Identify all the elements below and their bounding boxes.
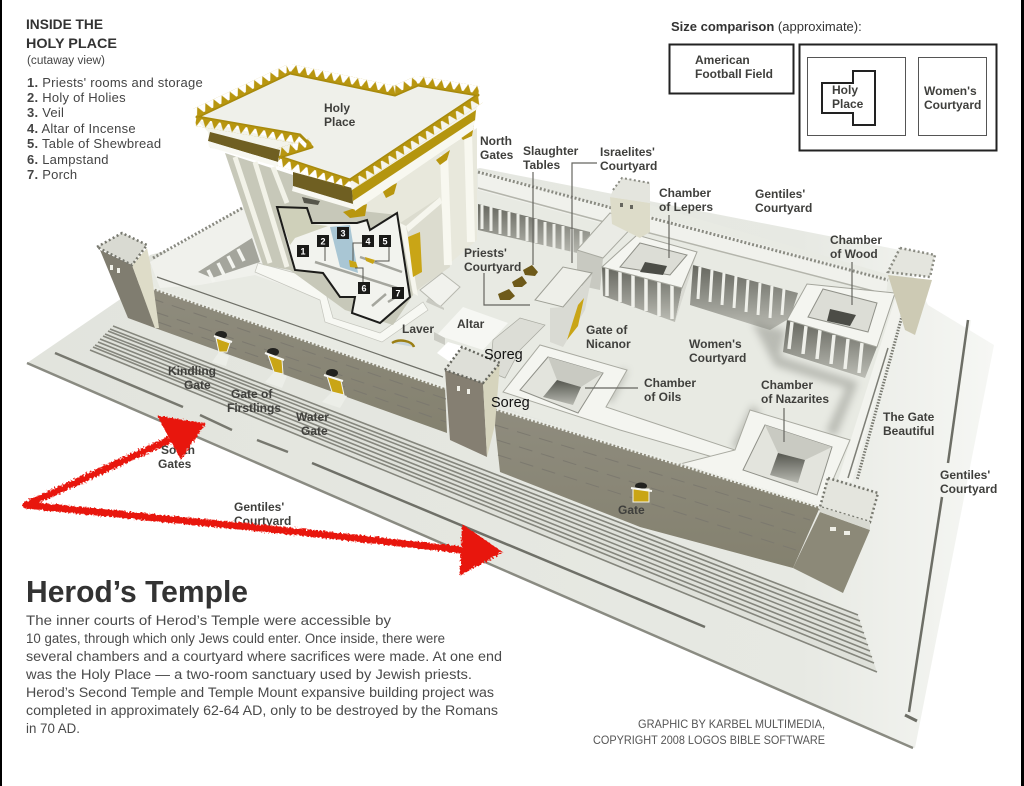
red hand-drawn arrow — [26, 417, 501, 574]
north wall — [478, 170, 888, 295]
chamber of lepers — [602, 235, 697, 288]
map labels: Holy — [324, 101, 350, 115]
map labels: Gate of — [231, 387, 273, 401]
map labels: Israelites' — [600, 145, 655, 159]
slanted gatehouse — [577, 213, 637, 290]
map labels: Courtyard — [689, 351, 746, 365]
kindling gate door — [212, 331, 232, 366]
map labels: Chamber — [644, 376, 696, 390]
water gate door — [322, 369, 347, 408]
map labels: of Wood — [830, 247, 878, 261]
temple roof — [193, 64, 483, 211]
number badge 7: 7 — [395, 288, 401, 298]
laver — [392, 341, 414, 347]
size comparison: Size comparison (approximate): — [671, 19, 862, 34]
leader lines — [484, 163, 852, 442]
tower: west corner — [97, 233, 159, 328]
legend list: 1. Priests' rooms and storage — [27, 75, 203, 90]
description paragraph: completed in approximately 62-64 AD, only to be destroyed by the Romans — [26, 703, 498, 718]
map labels: Soreg — [491, 395, 530, 411]
map labels: Gate — [184, 378, 211, 392]
map labels: Altar — [457, 317, 485, 331]
firstlings gate door — [265, 348, 287, 388]
football field box: Football Field — [695, 67, 773, 81]
map labels: Chamber — [830, 233, 882, 247]
map labels: Gate — [301, 424, 328, 438]
map labels: Place — [324, 115, 356, 129]
map labels: Priests' — [464, 246, 507, 260]
courtyard shadows — [604, 322, 858, 452]
credit: GRAPHIC BY KARBEL MULTIMEDIA, — [638, 717, 825, 731]
comparison frame — [800, 44, 996, 150]
east chambers and colonnades — [602, 252, 877, 378]
south wall gates — [212, 331, 652, 502]
tower: center corner — [445, 347, 500, 457]
credit — [593, 717, 825, 747]
porch stairs — [420, 273, 460, 307]
map labels: Chamber — [761, 378, 813, 392]
comparison frame: Women's — [924, 84, 977, 98]
football field box — [670, 44, 794, 94]
map labels: Courtyard — [755, 201, 812, 215]
soreg adjoining building — [490, 318, 545, 378]
map labels: Soreg — [484, 347, 523, 363]
map labels: Courtyard — [600, 159, 657, 173]
comparison frame: Courtyard — [924, 98, 981, 112]
map labels: Firstlings — [227, 401, 281, 415]
east wall strip — [838, 293, 907, 482]
column capitals — [343, 125, 474, 218]
map labels: Gentiles' — [755, 187, 805, 201]
slaughter tables — [498, 265, 538, 300]
chamber of oils block — [503, 345, 735, 462]
number badge 6: 6 — [361, 284, 367, 294]
chamber of nazarites block — [680, 410, 850, 510]
map labels — [158, 101, 997, 528]
credit: COPYRIGHT 2008 LOGOS BIBLE SOFTWARE — [593, 733, 825, 747]
description paragraph: The inner courts of Herod’s Temple were accessible by — [26, 613, 391, 628]
map labels: Courtyard — [234, 514, 291, 528]
legend list: 3. Veil — [27, 105, 64, 120]
number badge 4: 4 — [365, 236, 371, 246]
north colonnade — [478, 204, 590, 256]
chamber of wood — [787, 284, 895, 347]
map labels: Slaughter — [523, 144, 579, 158]
number badge 2: 2 — [320, 236, 326, 246]
football field box: American — [695, 53, 750, 67]
legend list: 5. Table of Shewbread — [27, 136, 161, 151]
map labels: Nicanor — [586, 337, 631, 351]
map labels: Tables — [523, 158, 560, 172]
title: inside the holy place: INSIDE THE — [26, 16, 103, 32]
title: inside the holy place: HOLY PLACE — [26, 35, 117, 51]
inner courts floor — [138, 172, 897, 512]
number badge 1: 1 — [300, 246, 306, 256]
title: inside the holy place: (cutaway view) — [27, 55, 105, 67]
description paragraph — [25, 613, 502, 736]
map labels: Gates — [480, 148, 514, 162]
map labels: The Gate — [883, 410, 935, 424]
map labels: Courtyard — [940, 482, 997, 496]
description paragraph: was the Holy Place — a two-room sanctuary used by Jewish priests. — [25, 667, 472, 682]
map labels: Gentiles' — [940, 468, 990, 482]
cutaway section — [277, 207, 410, 323]
size comparison — [670, 19, 996, 150]
map labels: Gentiles' — [234, 500, 284, 514]
side wall — [353, 128, 477, 295]
map labels: Gate — [618, 503, 645, 517]
legend list: 7. Porch — [27, 167, 77, 182]
tower: north-east corner — [888, 248, 935, 335]
porch front wall — [225, 153, 413, 325]
altar — [434, 307, 508, 362]
gate door — [631, 482, 652, 502]
map labels: Gates — [158, 457, 192, 471]
left courtyard wall — [150, 206, 328, 300]
gate of nicanor — [535, 267, 592, 347]
south front wall — [138, 277, 447, 433]
east front wall — [493, 408, 820, 568]
legend list: 2. Holy of Holies — [27, 90, 126, 105]
title: inside the holy place — [26, 16, 117, 67]
map labels: Water — [296, 410, 329, 424]
map labels: Laver — [402, 322, 434, 336]
legend list: 4. Altar of Incense — [27, 121, 136, 136]
legend list: 6. Lampstand — [27, 152, 109, 167]
front stairs — [90, 326, 877, 672]
gold door — [408, 232, 422, 277]
comparison frame: Holy — [832, 83, 858, 97]
tower: south-east corner — [793, 478, 878, 593]
description paragraph: 10 gates, through which only Jews could enter. Once inside, there were — [26, 631, 445, 646]
temple inner ledge — [255, 263, 428, 342]
comparison frame: Place — [832, 97, 864, 111]
tower: north middle — [610, 178, 650, 238]
number badge 5: 5 — [382, 236, 388, 246]
description paragraph: Herod’s Second Temple and Temple Mount expansive building project was — [26, 685, 494, 700]
heading: Herod’s Temple — [26, 574, 248, 609]
map labels: Kindling — [168, 364, 216, 378]
map labels: Gate of — [586, 323, 628, 337]
number badge 3: 3 — [340, 228, 346, 238]
map labels: of Lepers — [659, 200, 713, 214]
map labels: Chamber — [659, 186, 711, 200]
legend list — [27, 75, 203, 182]
temple building — [225, 125, 477, 342]
map labels: Courtyard — [464, 260, 521, 274]
map labels: Beautiful — [883, 424, 934, 438]
temple mount platform — [27, 168, 994, 748]
description paragraph: in 70 AD. — [26, 721, 80, 736]
map labels: South — [161, 443, 195, 457]
map labels: of Nazarites — [761, 392, 829, 406]
map labels: North — [480, 134, 512, 148]
description paragraph: several chambers and a courtyard where sacrifices were made. At one end — [26, 649, 502, 664]
map labels: of Oils — [644, 390, 682, 404]
map labels: Women's — [689, 337, 742, 351]
